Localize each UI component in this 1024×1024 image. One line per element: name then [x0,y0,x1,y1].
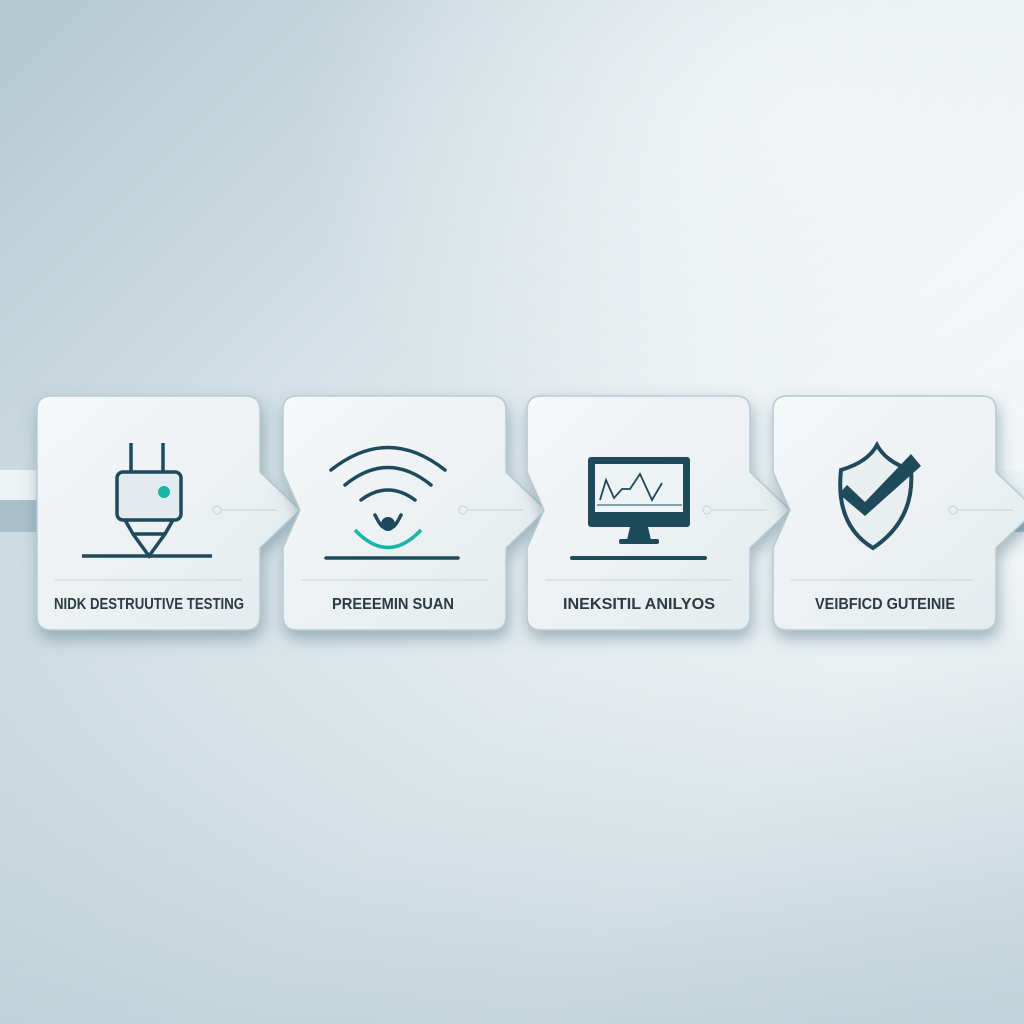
card 3: analysis [527,396,790,630]
card 1: non-destructive testing [37,396,300,630]
card 4: verified [773,396,1024,630]
label: PREEEMIN SUAN [332,596,454,613]
label: NIDK DESTRUUTIVE TESTING [54,596,244,613]
icon: shield check [839,445,921,548]
label: VEIBFICD GUTEINIE [815,596,955,613]
icon: probe [82,443,212,556]
label: INEKSITIL ANILYOS [563,596,715,613]
icon: monitor with chart [572,457,705,558]
connector bar left [0,470,45,532]
card 2: precision scan [283,396,546,630]
icon: scan waves [326,448,458,558]
connector bar right [990,470,1024,532]
